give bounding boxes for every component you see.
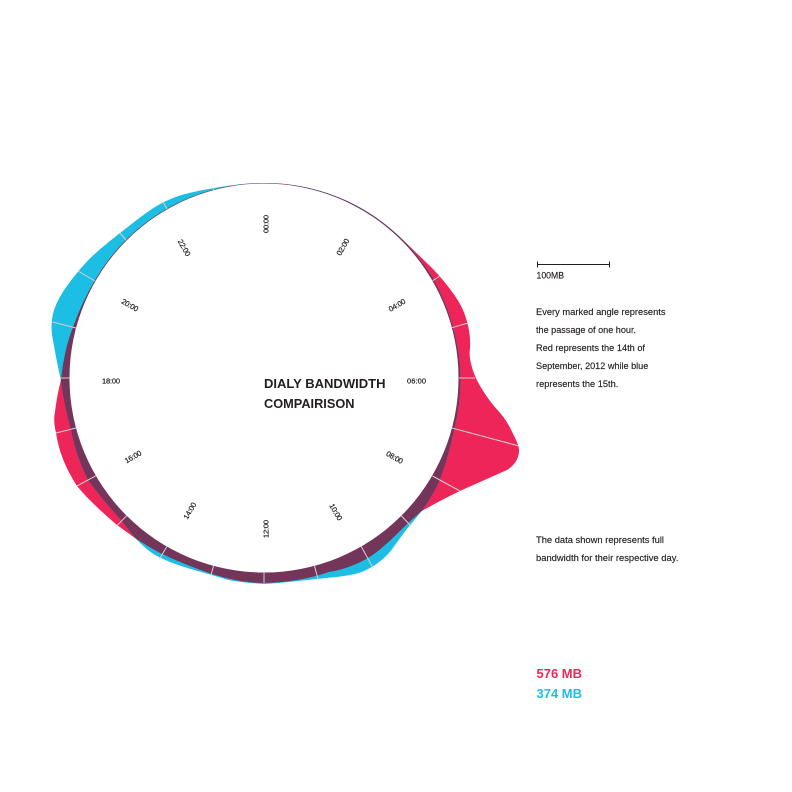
radial bandwidth chart [52, 183, 519, 584]
hour labels: 08:00 [385, 449, 405, 466]
hour labels: 02:00 [334, 237, 351, 257]
hour labels: 22:00 [176, 238, 193, 258]
data note: The data shown represents full [536, 535, 664, 545]
red area: 14th of September [54, 183, 519, 583]
scale bar: 100MB: 100MB [536, 270, 564, 280]
hour tick marks [53, 188, 519, 583]
explanation text: September, 2012 while blue [536, 361, 648, 371]
hour labels: 04:00 [387, 297, 407, 314]
inner white circle [70, 184, 458, 572]
totals legend [536, 666, 582, 701]
hour labels: 16:00 [123, 448, 143, 465]
explanation text: represents the 15th. [536, 379, 618, 389]
hour labels: 12:00 [262, 520, 271, 538]
explanation text [536, 307, 666, 389]
hour labels: 14:00 [181, 501, 198, 521]
explanation text: Every marked angle represents [536, 307, 666, 317]
blue area: 15th of September [52, 183, 461, 584]
explanation text: the passage of one hour. [536, 325, 636, 335]
hour labels: 00:00 [262, 215, 271, 233]
hour labels: 18:00 [102, 377, 120, 386]
title: COMPAIRISON [264, 396, 354, 411]
title [264, 376, 386, 411]
totals legend: 576 MB [536, 666, 582, 681]
scale bar: 100MB [536, 262, 610, 280]
data note: bandwidth for their respective day. [536, 553, 678, 563]
totals legend: 374 MB [536, 686, 582, 701]
data note [536, 535, 678, 563]
hour labels: 10:00 [327, 502, 344, 522]
title: DIALY BANDWIDTH [264, 376, 386, 391]
hour labels: 06:00 [407, 377, 426, 386]
purple overlap of both days [52, 183, 461, 584]
explanation text: Red represents the 14th of [536, 343, 645, 353]
hour labels: 20:00 [120, 297, 140, 314]
hour labels [102, 215, 426, 538]
